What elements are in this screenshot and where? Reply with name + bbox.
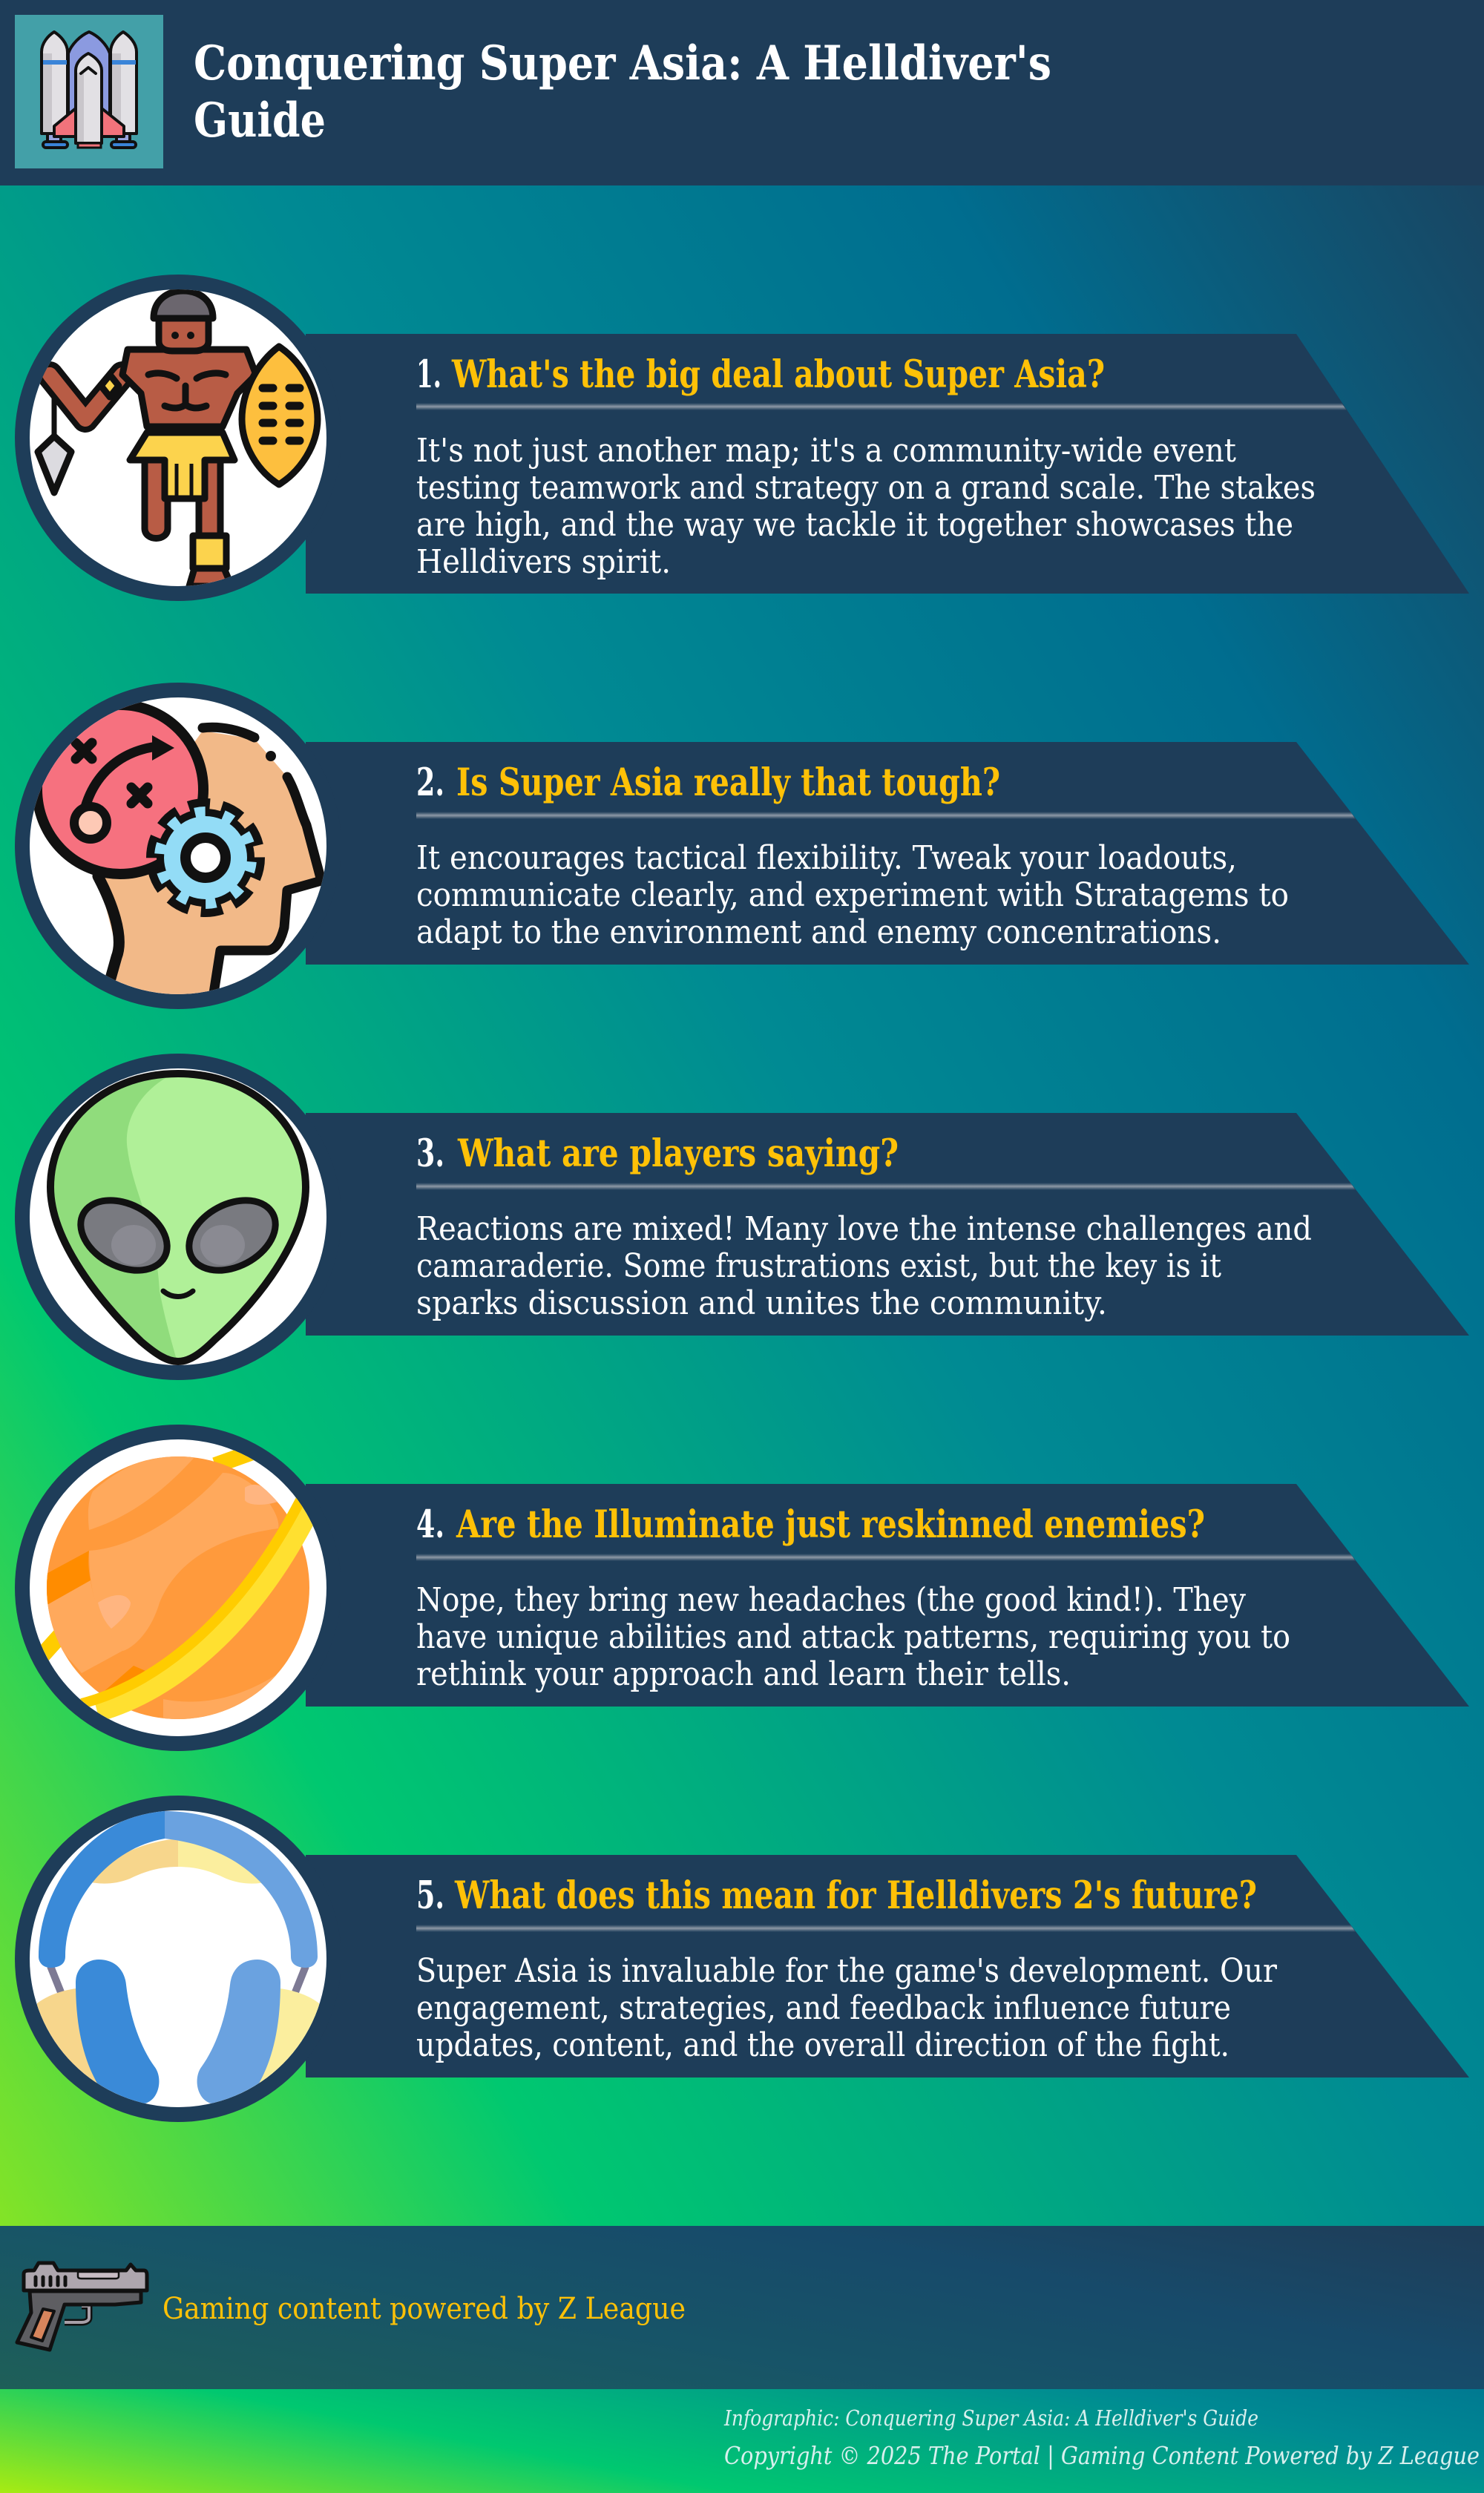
- text: answer 2: [416, 839, 1289, 951]
- panel: question 5: [306, 1855, 1469, 2078]
- heading: question 1: What's the big deal about Super Asia?: [451, 352, 1105, 397]
- text: answer 2: adapt to the environment and enemy concentrations.: [416, 913, 1221, 951]
- text: answer 5: [416, 1952, 1278, 2064]
- text: answer 5: Super Asia is invaluable for the game's development. Our: [416, 1952, 1278, 1990]
- text: answer 2: It encourages tactical flexibility. Tweak your loadouts,: [416, 839, 1237, 877]
- icon: pistol: [17, 2263, 147, 2350]
- panel: question 2: [306, 742, 1469, 965]
- text: answer 1: are high, and the way we tackle it together showcases the: [416, 506, 1293, 544]
- icon: alien head: [15, 1054, 341, 1380]
- heading: question 4: 4.: [416, 1502, 444, 1547]
- panel: question 3: [306, 1113, 1469, 1336]
- heading: question 5: 5.: [416, 1873, 444, 1918]
- heading: question 4: Are the Illuminate just reskinned enemies?: [456, 1502, 1205, 1547]
- brand text: Gaming content powered by Z League: [162, 2292, 686, 2326]
- text: answer 3: [416, 1210, 1312, 1322]
- heading: question 3: What are players saying?: [457, 1131, 899, 1176]
- text: answer 5: updates, content, and the overall direction of the fight.: [416, 2026, 1229, 2064]
- footer credits: [723, 2405, 1480, 2470]
- header bar: [0, 0, 1484, 185]
- text: answer 4: [416, 1581, 1290, 1693]
- heading: question 3: 3.: [416, 1131, 444, 1176]
- text: answer 4: rethink your approach and learn their tells.: [416, 1655, 1071, 1693]
- panel: question 4: [306, 1484, 1469, 1707]
- heading: question 1: 1.: [416, 352, 441, 397]
- text: answer 4: have unique abilities and attack patterns, requiring you to: [416, 1618, 1290, 1656]
- text: answer 1: It's not just another map; it's a community-wide event: [416, 432, 1236, 470]
- footer gradient strip: [0, 2389, 1484, 2493]
- text: answer 3: sparks discussion and unites the community.: [416, 1284, 1107, 1322]
- heading: question 2: 2.: [416, 761, 444, 805]
- footer credits: Infographic: Conquering Super Asia: A Helldiver's Guide: [723, 2405, 1258, 2431]
- icon: warrior in circle: [15, 275, 341, 601]
- text: answer 3: camaraderie. Some frustrations exist, but the key is it: [416, 1247, 1221, 1285]
- title: Guide: [194, 93, 326, 148]
- brand bar: [0, 2226, 1484, 2389]
- text: answer 5: engagement, strategies, and feedback influence future: [416, 1989, 1231, 2027]
- title: Conquering Super Asia: A Helldiver's: [194, 36, 1051, 91]
- icon: rocket logo: [15, 15, 163, 168]
- text: answer 1: Helldivers spirit.: [416, 543, 671, 581]
- panel: question 1: [306, 334, 1469, 594]
- text: answer 3: Reactions are mixed! Many love the intense challenges and: [416, 1210, 1312, 1248]
- icon: headphones: [15, 1796, 341, 2122]
- text: answer 2: communicate clearly, and experiment with Stratagems to: [416, 876, 1289, 914]
- title: [194, 36, 1051, 148]
- text: answer 1: [416, 432, 1316, 581]
- text: answer 4: Nope, they bring new headaches (the good kind!). They: [416, 1581, 1246, 1619]
- text: answer 1: testing teamwork and strategy on a grand scale. The stakes: [416, 469, 1316, 507]
- icon: ringed planet: [15, 1425, 341, 1751]
- heading: question 5: What does this mean for Helldivers 2's future?: [454, 1873, 1257, 1918]
- heading: question 2: Is Super Asia really that tough?: [456, 761, 1000, 805]
- icon: head with strategy and gear: [15, 683, 341, 1009]
